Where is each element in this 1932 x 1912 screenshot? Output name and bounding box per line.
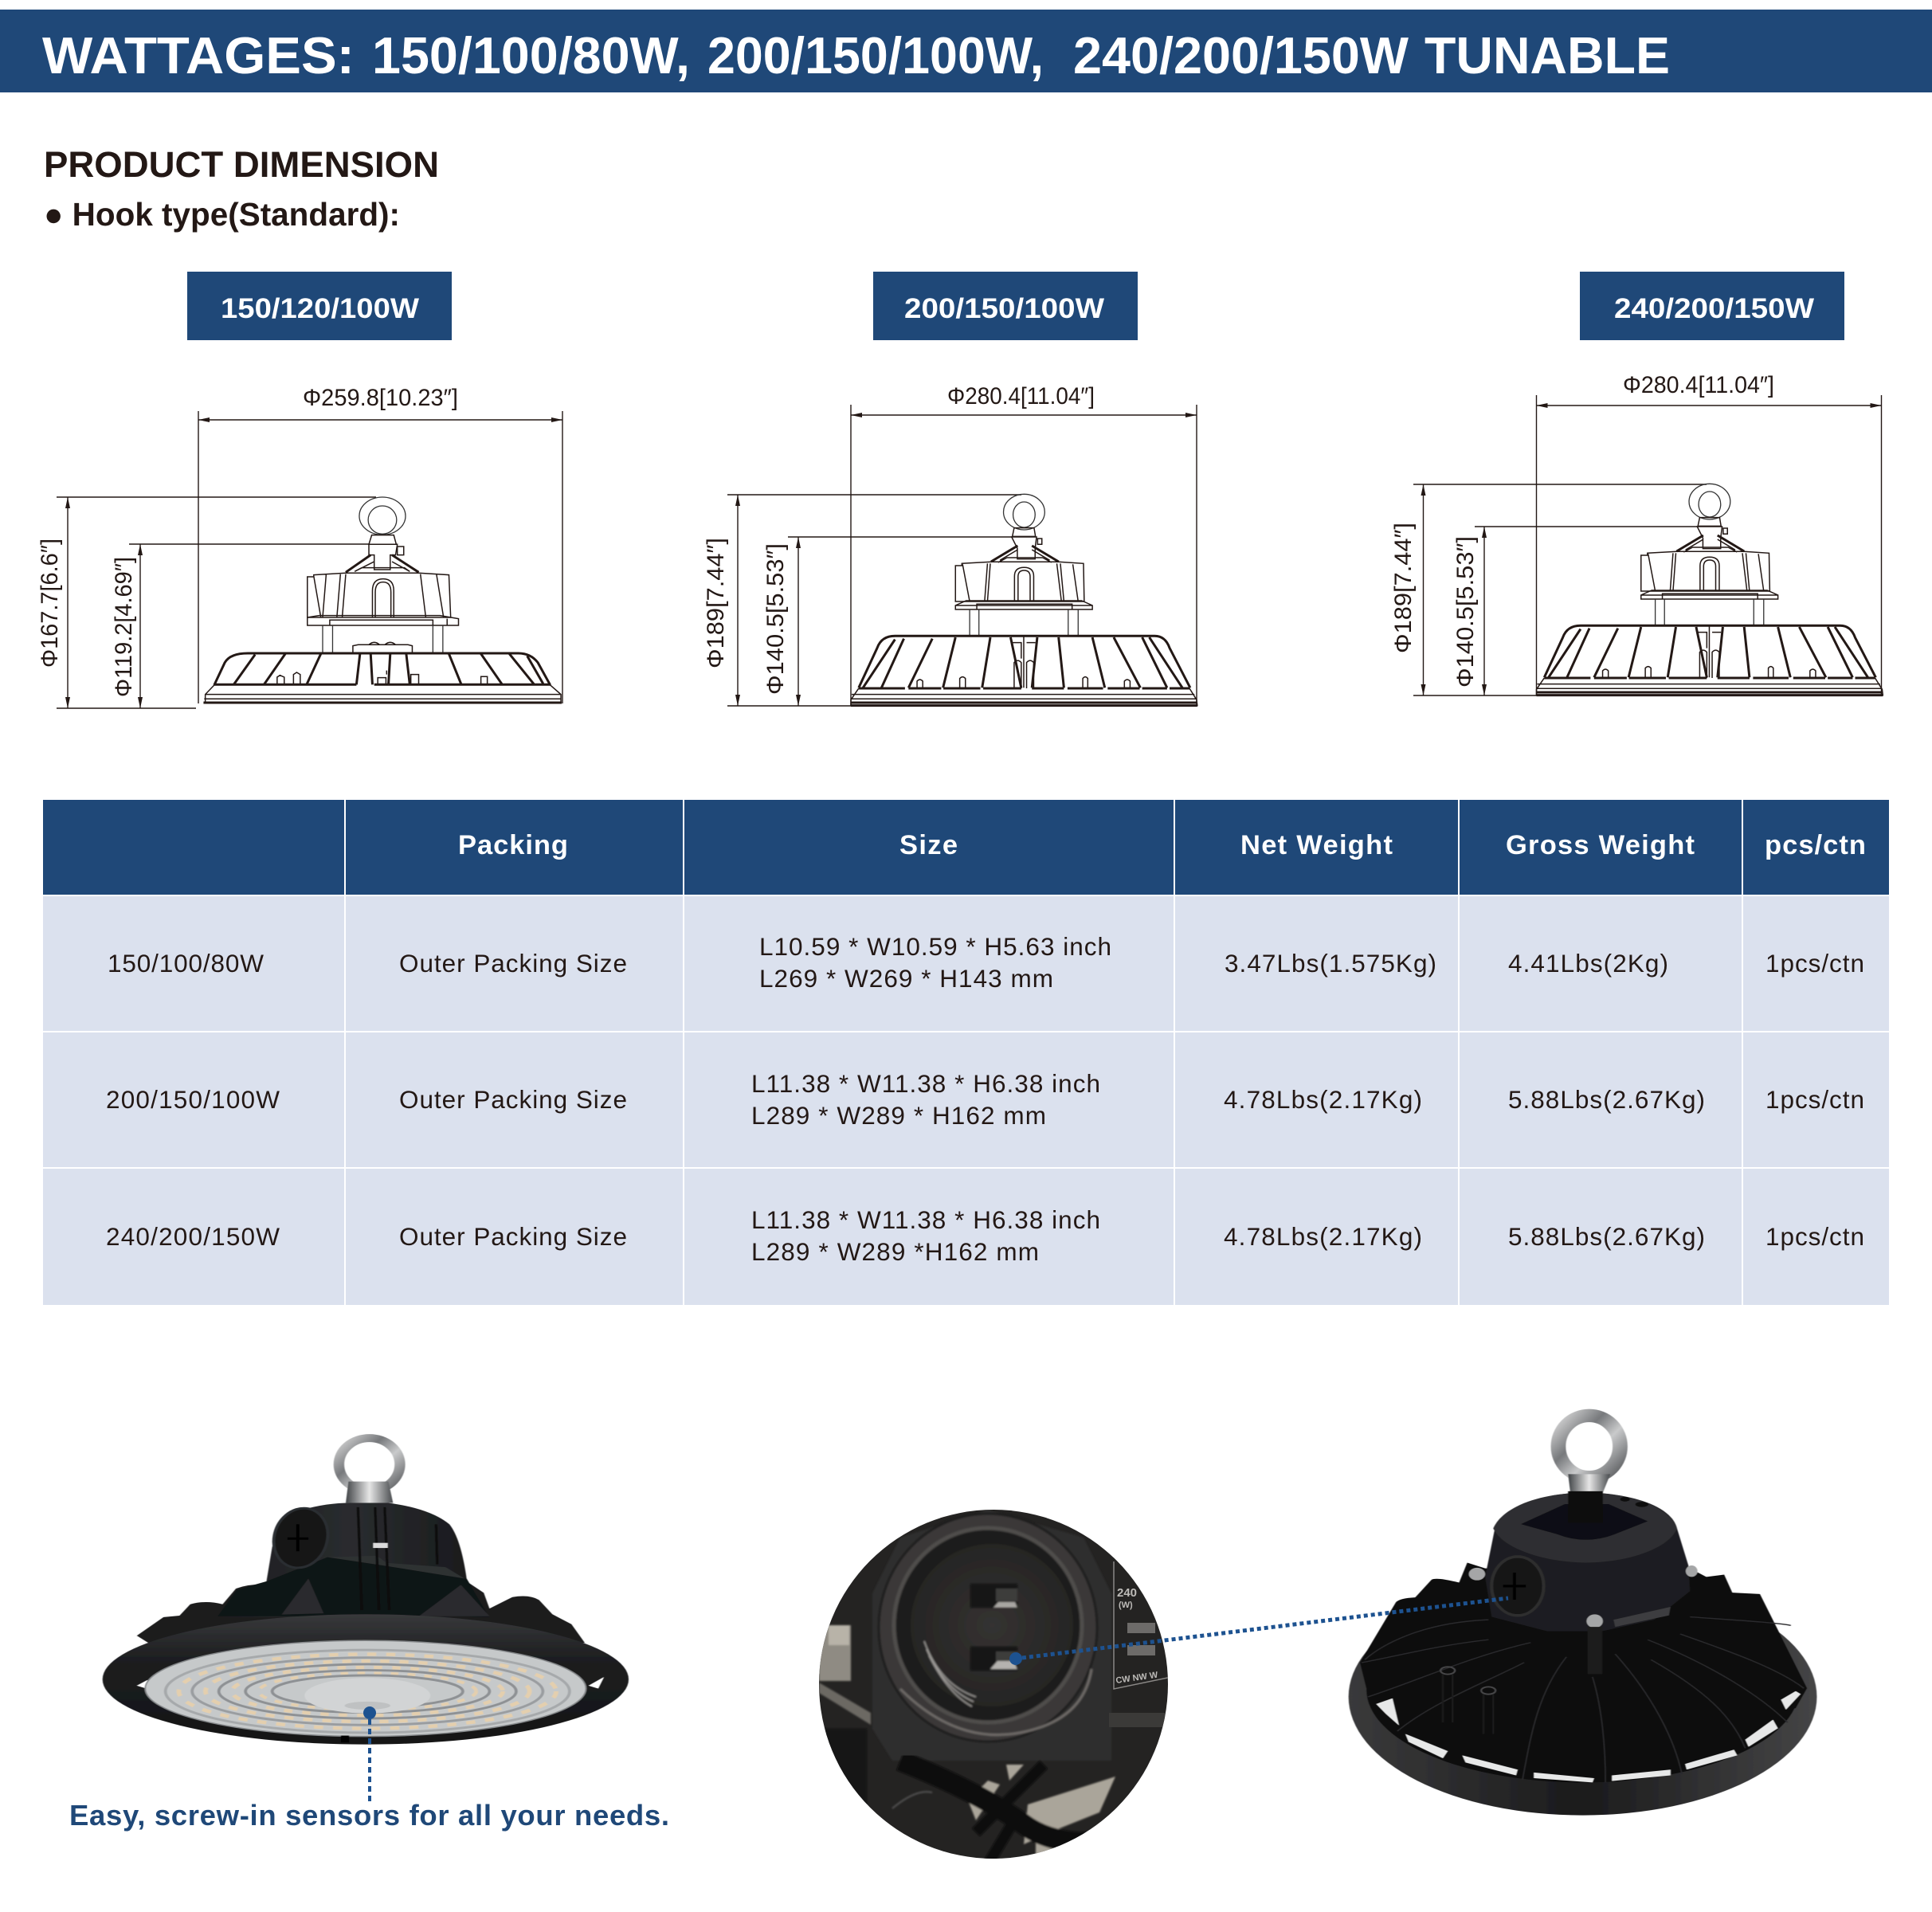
table header row: pcs/ctn [1765, 830, 1866, 860]
title banner [0, 10, 1932, 92]
dimension drawing: 200W lamp: Φ140.5[5.53″] [762, 543, 789, 695]
pegs [1440, 1667, 1495, 1734]
icon: eye hook [339, 1438, 400, 1503]
table row: 200/150/100W: L11.38 * W11.38 * H6.38 inch [751, 1069, 1100, 1098]
dimension drawing: 240W lamp: Φ189[7.44″] [1390, 523, 1417, 653]
table row: 240/200/150W [43, 1169, 1889, 1305]
rim [1349, 1578, 1816, 1816]
dimension drawing: 200W lamp: Φ280.4[11.04″] [947, 383, 1095, 409]
dimension drawing: 200W lamp: Φ189[7.44″] [703, 538, 729, 668]
dimension drawing: 200W lamp [703, 383, 1197, 706]
callout: dot marker and dotted line to sensor [363, 1706, 376, 1803]
table row: 150/100/80W: L269 * W269 * H143 mm [759, 964, 1053, 993]
packing table [43, 800, 1889, 1305]
table header row [43, 800, 1889, 895]
socket slots [970, 1584, 1017, 1671]
tag: 240/200/150W: 240/200/150W [1614, 293, 1814, 324]
light slots [1376, 1691, 1801, 1782]
switch label: 240 [1117, 1586, 1137, 1600]
heading: hook type: ● Hook type(Standard): [44, 196, 400, 233]
photo: lamp top view with fins [1349, 1416, 1816, 1816]
table row: 240/200/150W: L11.38 * W11.38 * H6.38 inch [751, 1205, 1100, 1234]
dimension drawing: 240W lamp: Φ280.4[11.04″] [1623, 372, 1774, 398]
tag: 200/150/100W [873, 272, 1138, 340]
table row: 150/100/80W: 4.41Lbs(2Kg) [1508, 949, 1668, 978]
table header row: Size [899, 830, 958, 860]
tag: 150/120/100W [187, 272, 452, 340]
heat sink fins [137, 1581, 585, 1643]
table row: 150/100/80W: 3.47Lbs(1.575Kg) [1225, 949, 1436, 978]
driver housing [217, 1503, 489, 1617]
switch label: (W) [1119, 1601, 1133, 1610]
table row: 150/100/80W: Outer Packing Size [399, 949, 627, 978]
tag: 150/120/100W: 150/120/100W [221, 293, 419, 324]
table row: 150/100/80W: L10.59 * W10.59 * H5.63 inch [759, 932, 1111, 961]
table row: 200/150/100W: 5.88Lbs(2.67Kg) [1508, 1085, 1705, 1114]
lamp rim [103, 1614, 629, 1745]
table row: 240/200/150W: 4.78Lbs(2.17Kg) [1224, 1222, 1422, 1251]
table header row: Net Weight [1240, 830, 1393, 860]
dimension drawing: 240W lamp: Φ140.5[5.53″] [1452, 536, 1479, 688]
fin lines [1362, 1617, 1804, 1782]
table header row: Gross Weight [1506, 830, 1695, 860]
table row: 150/100/80W [43, 896, 1889, 1031]
title banner: WATTAGES: [42, 26, 355, 84]
table row: 240/200/150W: 5.88Lbs(2.67Kg) [1508, 1222, 1705, 1251]
table row: 200/150/100W: L289 * W289 * H162 mm [751, 1101, 1046, 1130]
title banner: 240/200/150W [1073, 26, 1409, 84]
callout: dotted connector between socket and lamp [1009, 1598, 1508, 1665]
table header row: Packing [458, 830, 568, 860]
table row: 240/200/150W: L289 * W289 *H162 mm [751, 1237, 1039, 1266]
switch label [1109, 1561, 1173, 1727]
sensor cap [268, 1506, 333, 1570]
tag: 240/200/150W [1580, 272, 1844, 340]
table row: 200/150/100W [43, 1032, 1889, 1167]
table row: 200/150/100W: 4.78Lbs(2.17Kg) [1224, 1085, 1422, 1114]
photo: lamp underside with sensor [103, 1438, 629, 1745]
table row: 150/100/80W: 150/100/80W [108, 949, 264, 978]
table row: 240/200/150W: Outer Packing Size [399, 1222, 627, 1251]
LED lens [145, 1640, 586, 1737]
title banner: 150/100/80W, [372, 26, 690, 84]
title banner: 200/150/100W, [707, 26, 1044, 84]
title banner: TUNABLE [1425, 26, 1670, 84]
dimension drawing: 150W lamp: Φ167.7[6.6″] [37, 539, 63, 668]
table row: 200/150/100W: Outer Packing Size [399, 1085, 627, 1114]
driver housing [1485, 1493, 1690, 1631]
switch label: CW NW W [1115, 1671, 1159, 1686]
photo: socket close-up [819, 1510, 1173, 1864]
eye hook [1558, 1416, 1620, 1522]
table row: 200/150/100W: 200/150/100W [106, 1085, 280, 1114]
sensor cap [1491, 1557, 1544, 1616]
socket ring [872, 1510, 1111, 1761]
dimension drawing: 150W lamp: Φ259.8[10.23″] [303, 385, 458, 411]
table row: 200/150/100W: 1pcs/ctn [1765, 1085, 1864, 1114]
callout text: screw-in sensors: Easy, screw-in sensors for all your needs. [69, 1799, 669, 1832]
wires [892, 1756, 1116, 1859]
dimension drawing: 150W lamp [37, 385, 562, 708]
table row: 240/200/150W: 1pcs/ctn [1765, 1222, 1864, 1251]
glass element left [819, 1625, 871, 1808]
bolts [1469, 1565, 1698, 1628]
table row: 240/200/150W: 240/200/150W [106, 1222, 280, 1251]
tag: 200/150/100W: 200/150/100W [904, 293, 1104, 324]
heading: product dimension: PRODUCT DIMENSION [44, 144, 439, 185]
dimension drawing: 240W lamp [1390, 372, 1883, 695]
table row: 150/100/80W: 1pcs/ctn [1765, 949, 1864, 978]
fin body [1360, 1562, 1807, 1708]
dimension drawing: 150W lamp: Φ119.2[4.69″] [111, 557, 137, 697]
